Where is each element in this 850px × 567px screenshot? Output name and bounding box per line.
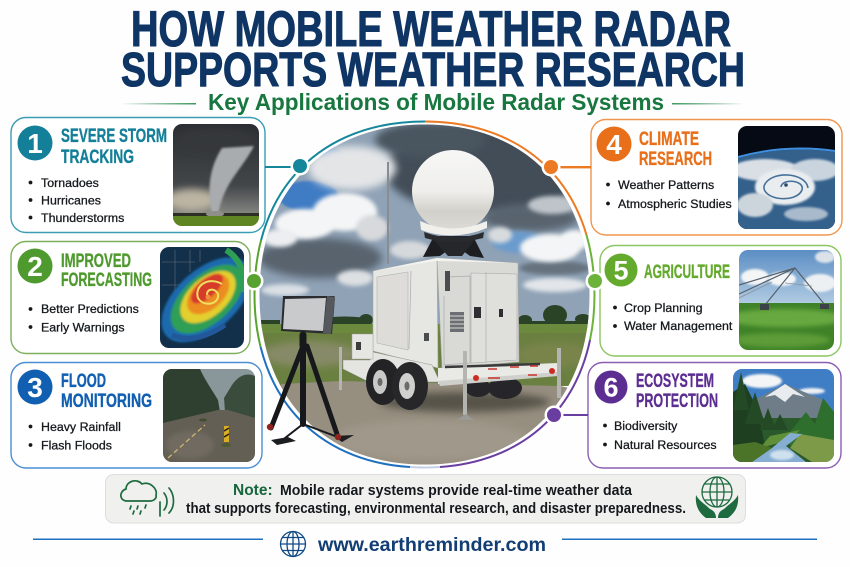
image: tornado bbox=[166, 124, 259, 226]
mast antenna bbox=[387, 162, 389, 264]
heading: MONITORING bbox=[61, 390, 152, 412]
heading bbox=[61, 125, 167, 168]
note text: that supports forecasting, environmental research, and disaster preparedness. bbox=[186, 501, 686, 517]
image: flooded road bbox=[163, 369, 255, 462]
badge 6 bbox=[594, 370, 628, 404]
heading bbox=[639, 128, 712, 170]
heading: AGRICULTURE bbox=[644, 261, 730, 283]
bullets: Water Management bbox=[624, 319, 733, 333]
bullets: Atmospheric Studies bbox=[618, 197, 732, 211]
heading: TRACKING bbox=[61, 146, 134, 168]
badge 5: 5 bbox=[613, 256, 629, 286]
bullets: Better Predictions bbox=[41, 302, 139, 316]
tripod legs bbox=[271, 335, 338, 438]
tripod feet bbox=[267, 424, 354, 445]
horizon tree line bbox=[260, 305, 591, 326]
badge 2 bbox=[18, 248, 52, 284]
panel: agriculture bbox=[600, 246, 845, 356]
panel: flood monitoring bbox=[11, 362, 262, 468]
panel bbox=[281, 296, 335, 334]
dark storm clouds bbox=[258, 122, 591, 278]
note text bbox=[186, 482, 686, 517]
panel: ecosystem protection bbox=[588, 362, 841, 468]
badge 4: 4 bbox=[606, 129, 622, 160]
badge 3: 3 bbox=[27, 372, 43, 403]
heading bbox=[61, 370, 152, 412]
heading: IMPROVED bbox=[61, 250, 131, 272]
bullets: Crop Planning bbox=[624, 301, 703, 315]
badge 1 bbox=[18, 126, 52, 160]
bullets: Flash Floods bbox=[41, 438, 112, 452]
image: mountain river bbox=[733, 369, 834, 462]
bullets: Hurricanes bbox=[41, 194, 101, 208]
icon: globe bbox=[280, 532, 306, 556]
heading bbox=[61, 250, 152, 291]
trailer box bbox=[373, 258, 519, 368]
gravel ground bbox=[280, 381, 568, 464]
footer bbox=[33, 532, 817, 556]
badge 2: 2 bbox=[27, 251, 43, 282]
heading: ECOSYSTEM bbox=[636, 370, 714, 392]
grass field bbox=[255, 324, 595, 386]
bullets: Biodiversity bbox=[614, 419, 678, 433]
rear wheels bbox=[465, 377, 522, 399]
badge 3 bbox=[18, 370, 52, 404]
bullets bbox=[29, 176, 124, 225]
bullets bbox=[606, 178, 732, 211]
badge 5 bbox=[604, 254, 638, 286]
icon: globe in hands bbox=[696, 477, 738, 518]
central radar photo circle bbox=[244, 120, 604, 470]
panel: climate research bbox=[591, 120, 842, 235]
note text: Note: bbox=[233, 482, 273, 499]
heading: CLIMATE bbox=[639, 128, 699, 150]
tripod sensor panel bbox=[267, 296, 354, 445]
bullets: Heavy Rainfall bbox=[41, 420, 121, 434]
bullets bbox=[29, 302, 139, 334]
photo: radar trailer in a field bbox=[255, 120, 595, 470]
badge 6: 6 bbox=[603, 372, 619, 402]
note text: Mobile radar systems provide real-time weather data bbox=[280, 483, 633, 499]
bullets bbox=[29, 420, 121, 452]
image: irrigation field bbox=[739, 250, 834, 350]
panel: severe storm tracking bbox=[11, 118, 265, 232]
image: earth from space bbox=[738, 126, 835, 229]
bullets: Early Warnings bbox=[41, 320, 125, 334]
panel: improved forecasting bbox=[11, 241, 267, 358]
bullets: Natural Resources bbox=[614, 438, 717, 452]
badge 4 bbox=[596, 126, 632, 162]
heading: FORECASTING bbox=[61, 269, 152, 291]
icon: rain cloud with radar signal bbox=[121, 481, 174, 516]
heading: FLOOD bbox=[61, 370, 106, 392]
heading: PROTECTION bbox=[636, 390, 718, 412]
radome dome bbox=[412, 150, 494, 258]
heading: RESEARCH bbox=[639, 148, 712, 170]
blue sky patches bbox=[278, 148, 544, 253]
bullets: Tornadoes bbox=[41, 176, 99, 190]
bullets bbox=[603, 419, 717, 452]
heading bbox=[636, 370, 718, 412]
badge 1: 1 bbox=[27, 128, 43, 159]
connectors and nodes bbox=[244, 156, 604, 424]
subtitle: Key Applications of Mobile Radar Systems bbox=[208, 89, 664, 115]
ring segments bbox=[254, 122, 594, 468]
website: www.earthreminder.com bbox=[317, 535, 546, 556]
radar trailer bbox=[339, 150, 561, 420]
bullets: Weather Patterns bbox=[618, 178, 714, 192]
bullets bbox=[613, 301, 733, 333]
heading: SEVERE STORM bbox=[61, 125, 167, 147]
white cumulus clouds bbox=[261, 146, 590, 296]
image: radar map bbox=[160, 247, 244, 348]
trailer frame and wheels bbox=[339, 334, 561, 420]
note box bbox=[106, 474, 746, 523]
title bbox=[121, 1, 745, 97]
bullets: Thunderstorms bbox=[41, 211, 124, 225]
